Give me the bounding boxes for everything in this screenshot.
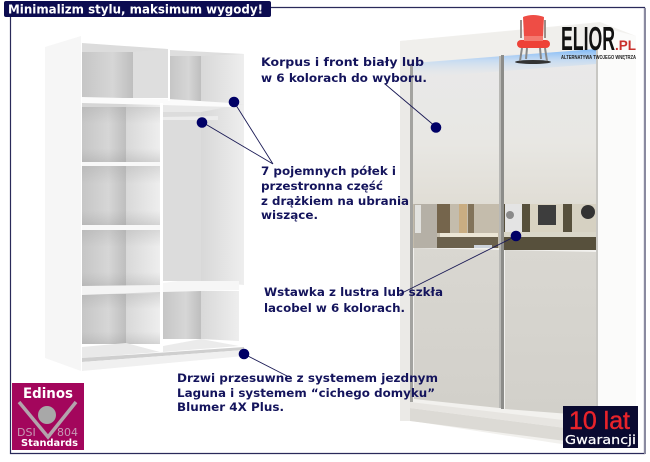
divider and base	[160, 103, 163, 352]
text: shelves: 7 pojemnych półek i	[261, 164, 396, 178]
text: mirror insert	[264, 285, 443, 315]
upper door left	[413, 56, 499, 204]
sliding-door wardrobe illustration	[400, 22, 636, 450]
text: sliding doors: Laguna i systemem “cichego domyku”	[177, 386, 435, 400]
right column lower	[163, 281, 239, 352]
text: mirror insert: lacobel w 6 kolorach.	[264, 301, 405, 315]
text: shelves	[261, 164, 409, 222]
text: sliding doors: Drzwi przesuwne z systemem jezdnym	[177, 371, 438, 385]
text: shelves: z drążkiem na ubrania	[261, 194, 409, 208]
text: mirror insert: Wstawka z lustra lub szkła	[264, 285, 443, 299]
logo: Elior chair and wordmark	[515, 15, 636, 64]
badge: 10 lat Gwarancji: Gwarancji	[565, 433, 636, 447]
upper left compartment	[82, 43, 168, 98]
aluminium profiles	[410, 64, 413, 402]
hanging rail	[163, 116, 218, 120]
text: shelves: wiszące.	[261, 208, 318, 222]
upper right compartment	[170, 50, 244, 104]
main shelf	[82, 97, 231, 107]
hanging section	[163, 104, 244, 285]
logo: Elior chair and wordmark: .PL	[615, 37, 636, 53]
badge: 10 lat Gwarancji: 10 lat	[569, 407, 630, 435]
text: body and front	[261, 55, 427, 85]
text: body and front: w 6 kolorach do wyboru.	[261, 71, 427, 85]
title banner: Minimalizm stylu, maksimum wygody!	[8, 2, 263, 16]
text: sliding doors: Blumer 4X Plus.	[177, 400, 284, 414]
badge: Edinos DSI 804 Standards: 804	[57, 426, 78, 439]
upper door right	[504, 50, 596, 204]
lower door left	[414, 248, 499, 408]
badge: Edinos DSI 804 Standards: Standards	[21, 438, 78, 449]
mirror insert right	[504, 204, 596, 250]
text: shelves: przestronna część	[261, 179, 383, 193]
badge: Edinos DSI 804 Standards: DSI	[17, 426, 36, 439]
blue light strip	[413, 49, 596, 78]
badge: Edinos DSI 804 Standards	[12, 383, 84, 450]
badge: 10 lat Gwarancji	[563, 406, 638, 448]
mirror insert left	[413, 204, 499, 248]
plinth	[410, 408, 597, 445]
callout lines and markers	[197, 84, 521, 376]
lower door right	[505, 250, 596, 416]
left column shelves	[82, 103, 160, 358]
text: body and front: Korpus i front biały lub	[261, 55, 424, 69]
text: sliding doors	[177, 371, 438, 414]
badge: Edinos DSI 804 Standards: Edinos	[23, 386, 73, 402]
icon: red chair	[515, 15, 551, 64]
open wardrobe illustration	[45, 36, 244, 371]
